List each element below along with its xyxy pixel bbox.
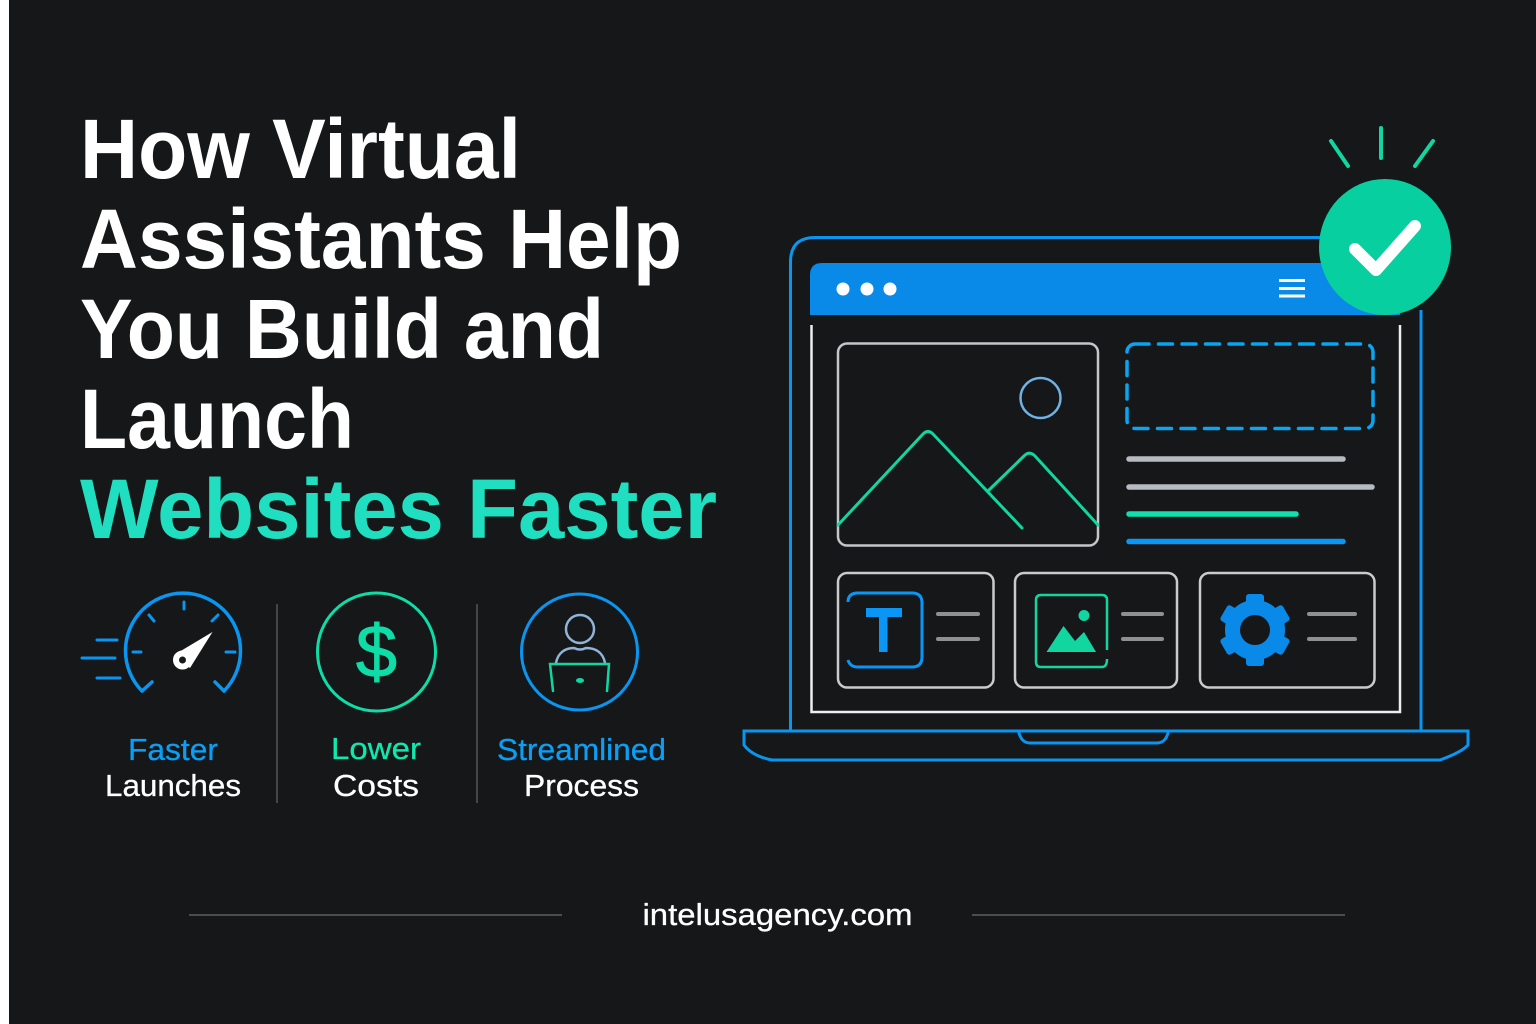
label: streamlined process bbox=[497, 732, 666, 803]
laptop illustration bbox=[744, 238, 1468, 760]
label: faster launches: Faster bbox=[128, 732, 218, 767]
card: text block bbox=[838, 573, 994, 688]
label: streamlined process: Process bbox=[524, 768, 639, 803]
icon: speedometer bbox=[82, 593, 240, 691]
laptop base bbox=[744, 731, 1468, 760]
card: settings block bbox=[1200, 573, 1374, 688]
label: faster launches bbox=[105, 732, 241, 803]
label: lower costs bbox=[331, 731, 421, 803]
icon: dollar coin bbox=[318, 593, 436, 711]
image placeholder bbox=[838, 344, 1098, 546]
title: How Virtual bbox=[80, 102, 521, 196]
label: faster launches: Launches bbox=[105, 768, 241, 803]
browser window outline bbox=[812, 325, 1400, 712]
title: Websites Faster bbox=[80, 462, 717, 556]
label: lower costs: Costs bbox=[333, 768, 419, 803]
footer rule left bbox=[189, 914, 562, 916]
divider bbox=[476, 604, 478, 803]
dashed placeholder bbox=[1127, 344, 1373, 428]
label: streamlined process: Streamlined bbox=[497, 732, 666, 767]
icon: success check badge bbox=[1319, 128, 1451, 315]
text lines bbox=[1129, 459, 1372, 542]
title: You Build and bbox=[80, 282, 604, 376]
browser toolbar bbox=[810, 263, 1400, 315]
label: lower costs: Lower bbox=[331, 731, 421, 766]
title bbox=[80, 102, 717, 556]
icon: person at laptop bbox=[522, 594, 638, 710]
footer website: intelusagency.com bbox=[642, 897, 912, 932]
card: image block bbox=[1015, 573, 1177, 688]
title: Assistants Help bbox=[80, 192, 682, 286]
divider bbox=[276, 604, 278, 803]
laptop screen outline bbox=[790, 238, 1421, 730]
icon: dollar coin: $ bbox=[356, 610, 397, 693]
title: Launch bbox=[80, 372, 354, 466]
footer rule right bbox=[972, 914, 1345, 916]
